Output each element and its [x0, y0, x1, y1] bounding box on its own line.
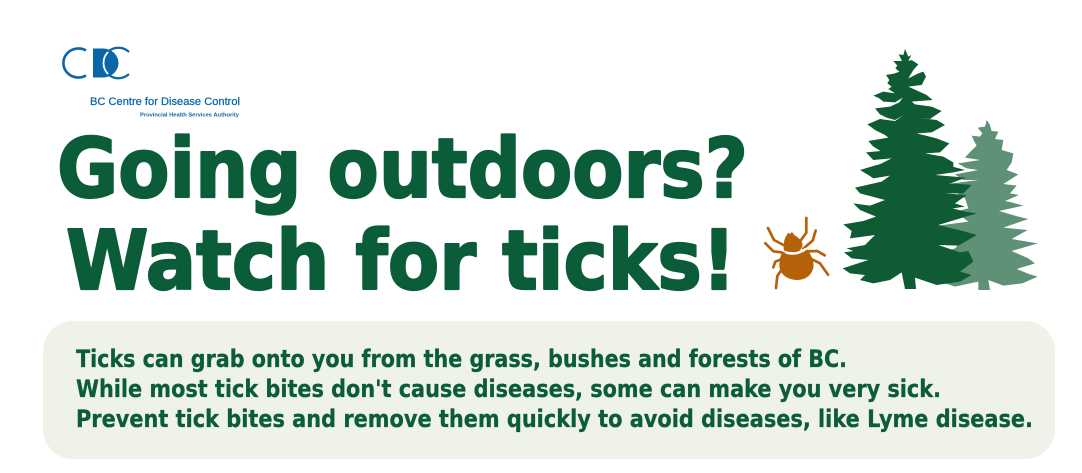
tree: light green small [935, 120, 1038, 290]
panel background [43, 321, 1055, 459]
title [57, 122, 748, 309]
title line 2: Watch for ticks! [66, 214, 736, 309]
icon: tick [765, 218, 828, 288]
panel text [76, 345, 1033, 433]
logo subtitle: Provincial Health Services Authority [140, 112, 240, 118]
panel text: Ticks can grab onto you from the grass, bushes and forests of BC. [76, 345, 847, 373]
trees [843, 49, 1038, 290]
tree: dark green large [843, 49, 977, 289]
logo mark: CDC [63, 48, 135, 78]
logo name: BC Centre for Disease Control [90, 96, 240, 108]
logo: BC Centre for Disease Control [63, 48, 240, 118]
title line 1: Going outdoors? [57, 122, 748, 217]
panel: intro message [43, 321, 1055, 459]
panel text: While most tick bites don't cause diseases, some can make you very sick. [76, 375, 941, 403]
